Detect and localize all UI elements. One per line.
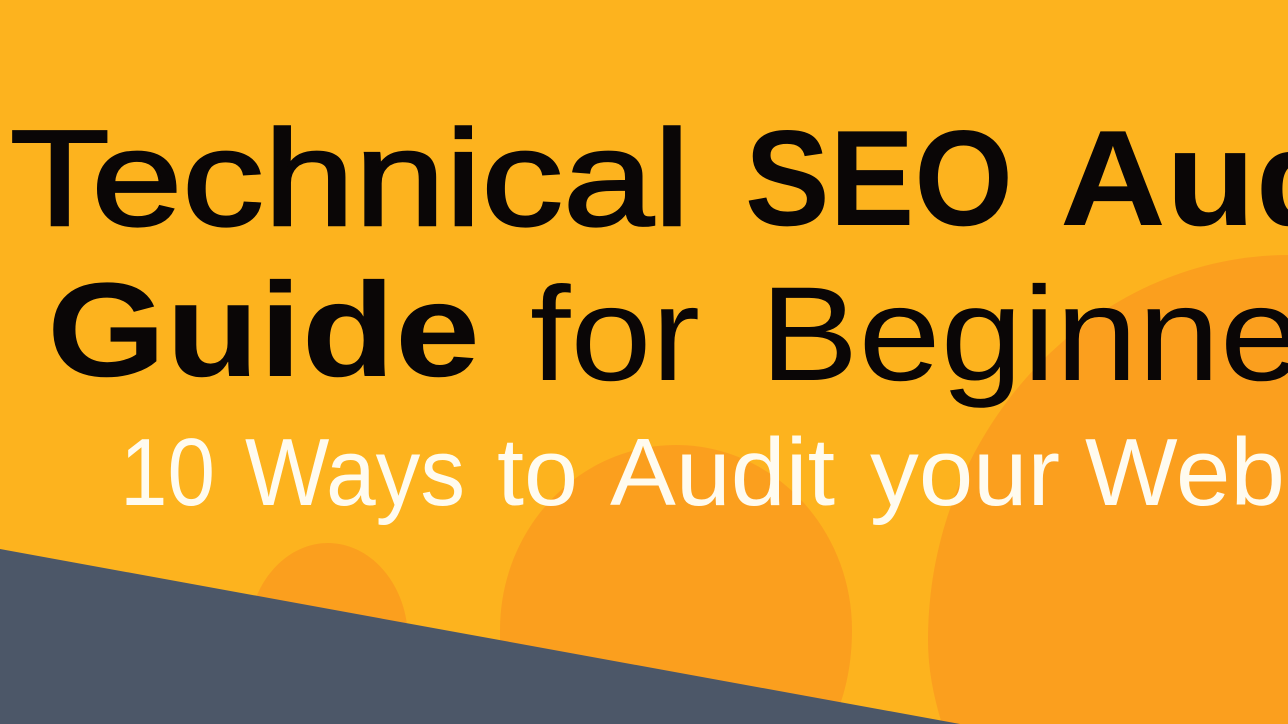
title line 2: Beginne (760, 260, 1288, 409)
slate diagonal band (0, 549, 960, 724)
title line 2: for (530, 260, 700, 409)
subtitle: to (497, 419, 578, 526)
title line 2 (47, 256, 1288, 409)
title line 1: SEO (745, 102, 1013, 254)
title line 1 (10, 102, 1288, 254)
subtitle: Audit (610, 419, 835, 526)
subtitle: your (870, 419, 1060, 526)
subtitle: Web (1085, 419, 1285, 526)
decorative circles (248, 255, 1288, 724)
subtitle (120, 419, 1285, 526)
title line 2: Guide (47, 256, 480, 405)
subtitle: Ways (245, 419, 465, 526)
title line 1: Technical (10, 102, 690, 254)
subtitle: 10 (120, 419, 215, 526)
